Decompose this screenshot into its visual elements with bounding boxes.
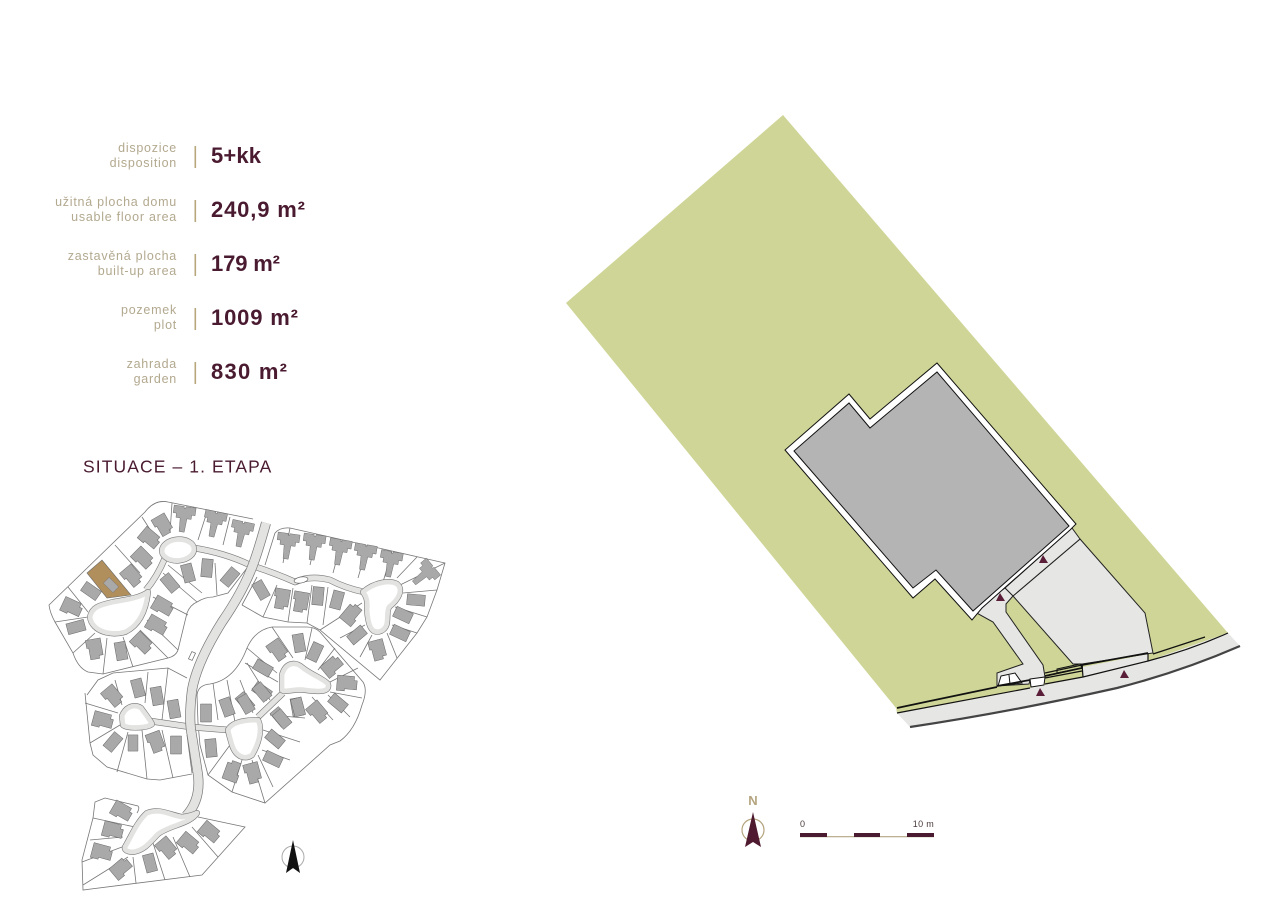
stat: disposition: disposition bbox=[110, 156, 177, 170]
stat: plot: plot bbox=[154, 318, 177, 332]
stat: usable floor area: usable floor area bbox=[71, 210, 177, 224]
icon: small north arrow bbox=[282, 840, 304, 873]
gate box bbox=[1030, 677, 1045, 687]
site plan: plot detail bbox=[566, 115, 1240, 727]
scale bar bbox=[800, 819, 934, 837]
garden plot bbox=[566, 115, 1228, 713]
house border bbox=[785, 363, 1076, 620]
stat: usable floor area: 240,9 m² bbox=[211, 197, 305, 222]
stat: usable floor area: užitná plocha domu bbox=[55, 195, 177, 209]
house roof bbox=[794, 372, 1069, 611]
stat: plot bbox=[121, 303, 298, 332]
lot boundaries bbox=[49, 501, 445, 890]
stat: garden: zahrada bbox=[127, 357, 177, 371]
stat: garden bbox=[127, 357, 287, 386]
street edge line bbox=[897, 633, 1228, 713]
street bbox=[897, 633, 1240, 727]
street kerb line bbox=[910, 646, 1240, 727]
cul-de-sac loops bbox=[90, 538, 400, 852]
stats panel bbox=[55, 141, 305, 386]
stat: garden: 830 m² bbox=[211, 359, 287, 384]
icon: north arrow: N bbox=[748, 793, 758, 808]
main spine bbox=[186, 523, 266, 816]
scale bar: 0 bbox=[800, 819, 805, 829]
stat: plot: 1009 m² bbox=[211, 305, 298, 330]
stat: disposition bbox=[110, 141, 262, 170]
stat: disposition: dispozice bbox=[118, 141, 177, 155]
houses bbox=[60, 505, 441, 881]
stat: usable floor area bbox=[55, 195, 305, 224]
branch roads bbox=[146, 548, 364, 730]
stat: built-up area: zastavěná plocha bbox=[68, 249, 177, 263]
carport bbox=[998, 673, 1022, 686]
stat: built-up area bbox=[68, 249, 280, 278]
verge between fence and street bbox=[1083, 654, 1149, 677]
driveway bbox=[1013, 539, 1153, 664]
terrace walkway bbox=[1005, 528, 1080, 596]
mailbox unit bbox=[1057, 664, 1082, 673]
icon: north arrow bbox=[742, 793, 764, 847]
heading: situace: SITUACE – 1. ETAPA bbox=[83, 456, 272, 476]
highlighted plot bbox=[87, 560, 131, 598]
roads bbox=[90, 523, 400, 852]
stat: built-up area: built-up area bbox=[98, 264, 177, 278]
entrance path bbox=[973, 588, 1045, 686]
scale bar: 10 m bbox=[913, 819, 934, 829]
stat: disposition: 5+kk bbox=[211, 143, 262, 168]
access marker triangles bbox=[996, 555, 1129, 696]
stat: built-up area: 179 m² bbox=[211, 251, 280, 276]
site map: 1st phase bbox=[49, 501, 445, 890]
fence bbox=[897, 653, 1148, 708]
stat: garden: garden bbox=[134, 372, 177, 386]
stat: plot: pozemek bbox=[121, 303, 177, 317]
